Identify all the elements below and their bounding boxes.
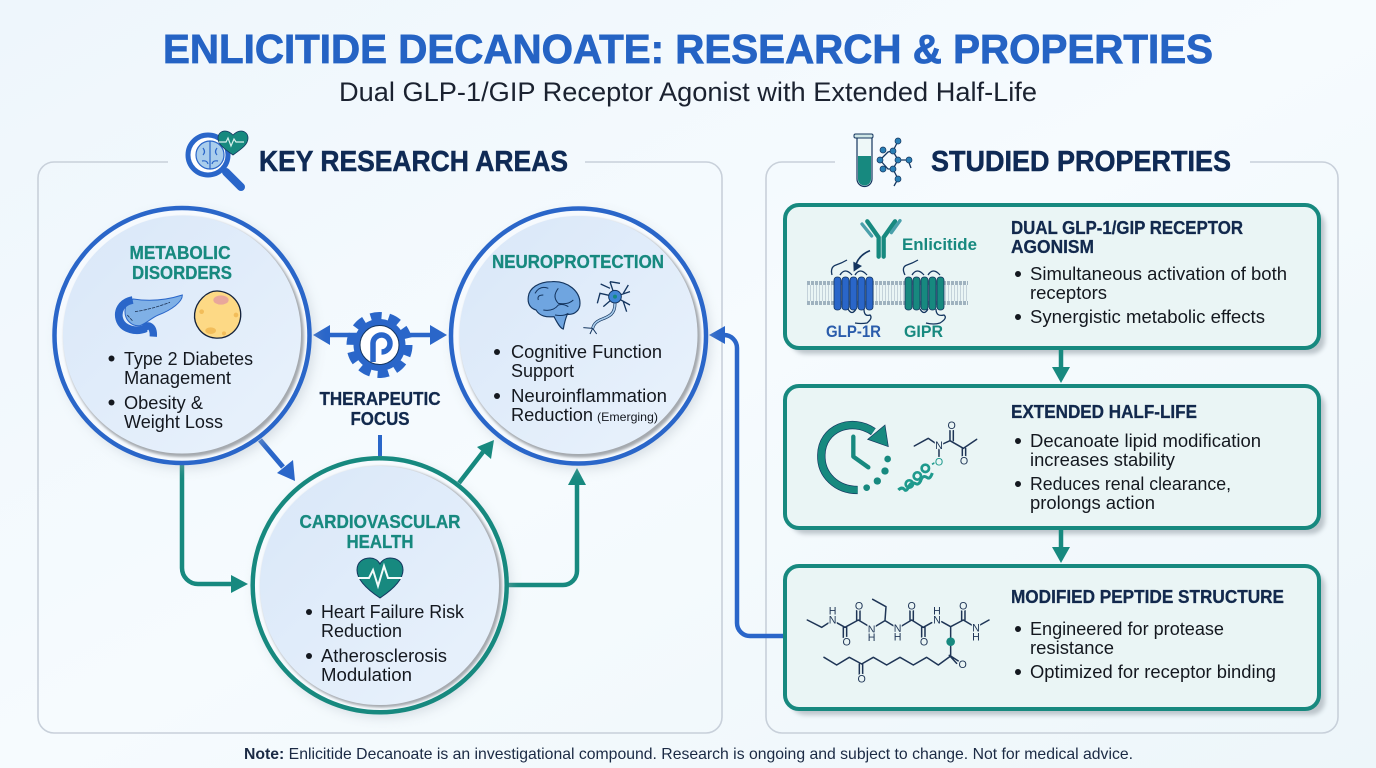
icon: peptide structural formula: O [855,601,863,613]
text: dual agonism [1011,218,1287,327]
heading: metabolic disorders [130,243,232,283]
circle: metabolic disorders [54,208,314,468]
connector: focus to cardiovascular [378,435,382,456]
icon: peptide structural formula [807,599,989,686]
icon: peptide structural formula: H [894,631,902,643]
icon: peptide structural formula: N [829,615,837,627]
label: GLP-1R: GLP-1R [826,322,881,341]
icon: fat cell [195,291,241,338]
text: modified peptide structure: Optimized for receptor binding [1030,662,1276,682]
icon: lipid chain molecule: O [960,456,968,468]
arrow: card two to card three [1052,530,1070,563]
text: modified peptide structure: resistance [1030,638,1114,658]
icon: peptide structural formula: H [829,605,837,617]
icon: brain [528,282,580,329]
heading: metabolic disorders: METABOLIC [130,243,230,263]
icon: peptide structural formula: N [894,623,902,635]
heading: cardiovascular health: HEALTH [346,532,414,552]
text: extended half-life: Reduces renal clearance, [1030,474,1231,494]
icon: therapeutic focus gear [352,317,408,373]
icon: peptide structural formula: O [908,601,916,613]
arrow: cardiovascular to neuroprotection (diagonal) [459,440,494,483]
icon: magnifier with brain and heart [188,131,248,187]
list: metabolic bullets: Weight Loss [124,412,223,432]
icon: peptide structural formula: H [972,631,980,643]
icon: lipid chain molecule: O [935,456,943,468]
icon: peptide structural formula: O [959,659,967,671]
receptor: GIPR [903,260,945,324]
arrow: peptide structure to neuroprotection [709,326,785,636]
diagram: cell membrane [807,283,968,303]
list: cardiovascular bullets: Heart Failure Risk [321,602,465,622]
icon: peptide structural formula: N [868,624,876,636]
text: dual agonism: receptors [1030,283,1107,303]
icon: peptide structural formula: O [959,601,967,613]
heading: cardiovascular health [300,512,460,552]
list: metabolic bullets: Obesity & [124,393,203,413]
icon: peptide structural formula: O [843,637,851,649]
label: GIPR: GIPR [904,322,943,341]
icon: peptide structural formula: N [972,622,980,634]
heading: neuroprotection: NEUROPROTECTION [492,252,664,272]
footnote: Note: Enlicitide Decanoate is an investigational compound. Research is ongoing and subject to change. Not for medical advice. [244,746,1133,763]
text: extended half-life: prolongs action [1030,493,1155,513]
text: modified peptide structure [1011,587,1284,682]
text: extended half-life [1011,402,1261,513]
icon: lipid chain molecule [898,420,977,490]
list: neuroprotection bullets: Support [511,361,574,381]
icon: pancreas [119,295,182,337]
text: extended half-life: EXTENDED HALF-LIFE [1011,402,1197,422]
icon: clock with arrow [821,425,891,491]
list: neuroprotection bullets [494,342,667,425]
icon: peptide structural formula: H [868,632,876,644]
arrow: metabolic to cardiovascular (teal elbow) [182,464,248,593]
heading: metabolic disorders: DISORDERS [132,263,232,283]
text: dual agonism: AGONISM [1011,237,1094,257]
card: modified peptide structure [785,566,1325,715]
receptor: GLP-1R [832,260,873,324]
panel: studied properties [766,134,1338,733]
card: dual receptor agonism [785,205,1325,354]
list: cardiovascular bullets: Reduction [321,621,402,641]
list: cardiovascular bullets: Modulation [321,665,412,685]
list: metabolic bullets [108,349,253,432]
subtitle: Dual GLP-1/GIP Receptor Agonist with Extended Half-Life [339,77,1037,107]
icon: neuron [583,282,630,334]
panel: key research areas [38,131,722,733]
list: neuroprotection bullets: Reduction [511,405,593,425]
icon: antibody [853,221,900,272]
arrow: metabolic to cardiovascular (blue) [260,440,295,481]
circle: neuroprotection [451,208,710,469]
label: therapeutic focus [320,389,440,429]
list: metabolic bullets: Management [124,368,231,388]
text: modified peptide structure: Engineered for protease [1030,619,1224,639]
list: metabolic bullets: Type 2 Diabetes [124,349,253,369]
text: dual agonism: DUAL GLP-1/GIP RECEPTOR [1011,218,1243,238]
icon: lipid chain molecule: O [948,420,956,432]
text: extended half-life: Decanoate lipid modification [1030,431,1261,451]
label: therapeutic focus: FOCUS [350,409,410,429]
list: neuroprotection bullets: (Emerging) [597,410,658,424]
icon: peptide structural formula: O [920,636,928,648]
title: ENLICITIDE DECANOATE: RESEARCH & PROPERTIES [163,26,1213,72]
text: dual agonism: Simultaneous activation of both [1030,264,1287,284]
text: modified peptide structure: MODIFIED PEPTIDE STRUCTURE [1011,587,1284,607]
list: cardiovascular bullets [306,602,465,685]
icon: test tube and molecule [854,134,912,187]
text: dual agonism: Synergistic metabolic effects [1030,307,1265,327]
icon: peptide structural formula: H [933,605,941,617]
label: enlicitide: Enlicitide [902,235,977,254]
arrow: card one to card two [1052,350,1070,383]
circle: cardiovascular health [253,458,510,717]
label: therapeutic focus: THERAPEUTIC [320,389,440,409]
icon: peptide structural formula: O [858,674,866,686]
heading: cardiovascular health: CARDIOVASCULAR [300,512,460,532]
icon: lipid chain molecule: N [935,440,943,452]
heading: key research areas: KEY RESEARCH AREAS [259,146,568,178]
card: extended half-life [785,386,1325,534]
icon: peptide structural formula: N [933,615,941,627]
list: cardiovascular bullets: Atherosclerosis [321,646,447,666]
list: neuroprotection bullets: Neuroinflammation [511,386,667,406]
arrow: two-way metabolic and neuroprotection [313,325,447,345]
list: neuroprotection bullets: Cognitive Function [511,342,662,362]
text: extended half-life: increases stability [1030,450,1175,470]
heading: studied properties: STUDIED PROPERTIES [931,146,1231,178]
icon: heart with pulse [357,558,403,598]
arrow: cardiovascular to neuroprotection (elbow) [508,468,586,585]
